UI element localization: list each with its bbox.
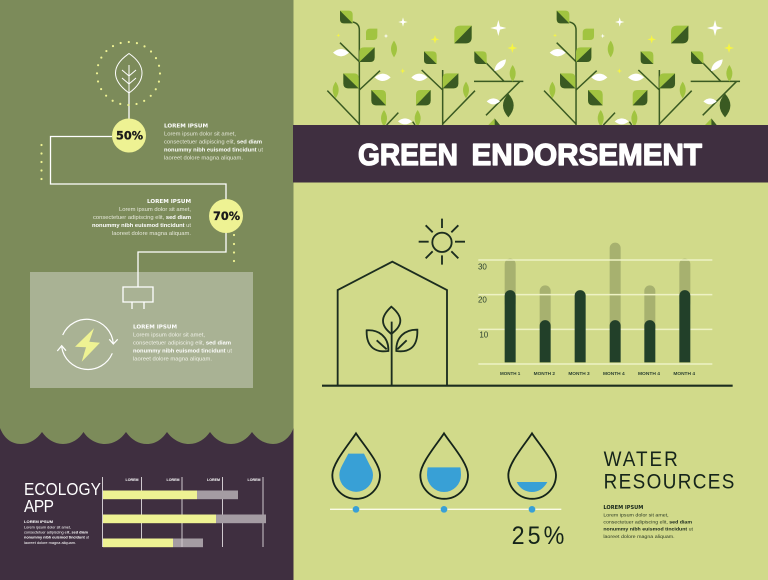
text block: 70%: consectetuer adipiscing elit, sed diam bbox=[93, 215, 191, 221]
text block: water: consectetuer adipiscing elit, sed diam bbox=[603, 520, 693, 526]
icon: energy cycle bbox=[57, 319, 118, 369]
text block: ecology: consectetuer adipiscing elit, sed diam bbox=[24, 530, 89, 534]
text block: water: LOREM IPSUM bbox=[603, 505, 643, 511]
text block: 50%: Lorem ipsum dolor sit amet, bbox=[164, 131, 236, 137]
icon: leaf with dotted ring bbox=[97, 42, 160, 105]
right background bbox=[293, 0, 768, 580]
bar chart: ecology: LOREM bbox=[126, 478, 139, 482]
icon: drop 2 bbox=[420, 433, 468, 513]
title bbox=[358, 137, 702, 172]
month labels: MONTH 4 bbox=[638, 371, 661, 376]
water section bbox=[330, 433, 734, 550]
connector line bbox=[50, 93, 226, 287]
text block: 50% bbox=[164, 123, 263, 161]
illustration: plants left bbox=[327, 11, 523, 127]
timeline bbox=[330, 507, 561, 511]
heading: water resources: RESOURCES bbox=[604, 471, 734, 494]
title: GREEN bbox=[358, 137, 458, 172]
title: ENDORSEMENT bbox=[472, 137, 702, 172]
text block: water: Lorem ipsum dolor sit amet, bbox=[603, 512, 669, 518]
text block: 50%: nonummy nibh euismod tincidunt ut bbox=[164, 147, 263, 153]
chart grid lines bbox=[478, 260, 712, 364]
text block: water: laoreet dolore magna aliquam. bbox=[603, 534, 675, 540]
month labels: MONTH 1 bbox=[500, 371, 521, 376]
text block: ecology bbox=[24, 520, 89, 545]
dotted accent left bbox=[40, 144, 43, 180]
heading: water resources: WATER bbox=[604, 448, 678, 471]
text block: 70% bbox=[92, 199, 191, 237]
dark bars bbox=[505, 290, 690, 362]
heading: ecology app: ECOLOGY bbox=[24, 480, 101, 499]
bottom left dark panel bbox=[0, 400, 294, 580]
icon: drop 3 bbox=[508, 433, 556, 513]
badge: 50%: 50% bbox=[116, 130, 143, 143]
axis labels bbox=[478, 262, 489, 339]
text block: energy card: consectetuer adipiscing elit, sed diam bbox=[133, 340, 231, 346]
stat: 25%: 25% bbox=[512, 522, 564, 550]
text block: 50%: laoreet dolore magna aliquam. bbox=[164, 155, 243, 161]
text block: water: nonummy nibh euismod tincidunt ut bbox=[603, 527, 694, 533]
text block: water bbox=[603, 505, 694, 540]
title band bbox=[293, 125, 768, 182]
month labels: MONTH 4 bbox=[673, 371, 696, 376]
text block: energy card: Lorem ipsum dolor sit amet, bbox=[133, 332, 205, 338]
bar chart: ecology bbox=[102, 477, 266, 547]
illustration: plants right bbox=[544, 11, 740, 127]
bar chart: ecology: LOREM bbox=[248, 478, 261, 482]
heading: ecology app: APP bbox=[24, 497, 54, 516]
text block: energy card: laoreet dolore magna aliquam. bbox=[133, 356, 212, 362]
axis labels: 20 bbox=[478, 296, 487, 305]
text block: ecology: Lorem ipsum dolor sit amet, bbox=[24, 525, 71, 529]
icon: sun bbox=[419, 219, 465, 265]
heading: ecology app bbox=[24, 480, 101, 516]
axis labels: 10 bbox=[479, 330, 489, 339]
dotted accent right bbox=[233, 234, 235, 262]
text block: 70%: LOREM IPSUM bbox=[147, 199, 191, 205]
month labels: MONTH 2 bbox=[534, 371, 556, 376]
panel: left green with scalloped edge bbox=[0, 0, 294, 444]
month labels: MONTH 4 bbox=[603, 371, 625, 376]
month labels: MONTH 3 bbox=[568, 371, 590, 376]
axis labels: 30 bbox=[478, 262, 487, 271]
bar chart: ecology: LOREM bbox=[207, 478, 220, 482]
month labels bbox=[500, 371, 696, 376]
bar chart: ecology: LOREM bbox=[166, 478, 180, 482]
light bars bbox=[505, 243, 690, 336]
icon: drop 1 bbox=[332, 433, 380, 513]
badge: 50% bbox=[112, 118, 146, 152]
heading: water resources bbox=[604, 448, 734, 494]
text block: energy card: LOREM IPSUM bbox=[133, 325, 177, 331]
text block: 70%: nonummy nibh euismod tincidunt ut bbox=[92, 223, 191, 229]
panel: translucent recycle card bbox=[30, 272, 253, 388]
text block: 70%: Lorem ipsum dolor sit amet, bbox=[119, 207, 191, 213]
text block: 50%: consectetuer adipiscing elit, sed diam bbox=[164, 139, 262, 145]
text block: 70%: laoreet dolore magna aliquam. bbox=[112, 231, 191, 237]
icon: greenhouse with plant bbox=[322, 262, 733, 386]
text block: energy card bbox=[133, 325, 232, 362]
icon: plug bbox=[123, 287, 153, 309]
text block: ecology: LOREM IPSUM bbox=[24, 520, 53, 524]
text block: ecology: laoreet dolore magna aliquam. bbox=[24, 541, 76, 545]
text block: ecology: nonummy nibh euismod tincidunt ut bbox=[24, 536, 89, 540]
text block: energy card: nonummy nibh euismod tincidunt ut bbox=[133, 348, 232, 354]
greenhouse and bar chart bbox=[322, 219, 733, 386]
badge: 70% bbox=[209, 199, 243, 233]
badge: 70%: 70% bbox=[213, 210, 240, 223]
text block: 50%: LOREM IPSUM bbox=[164, 123, 208, 129]
